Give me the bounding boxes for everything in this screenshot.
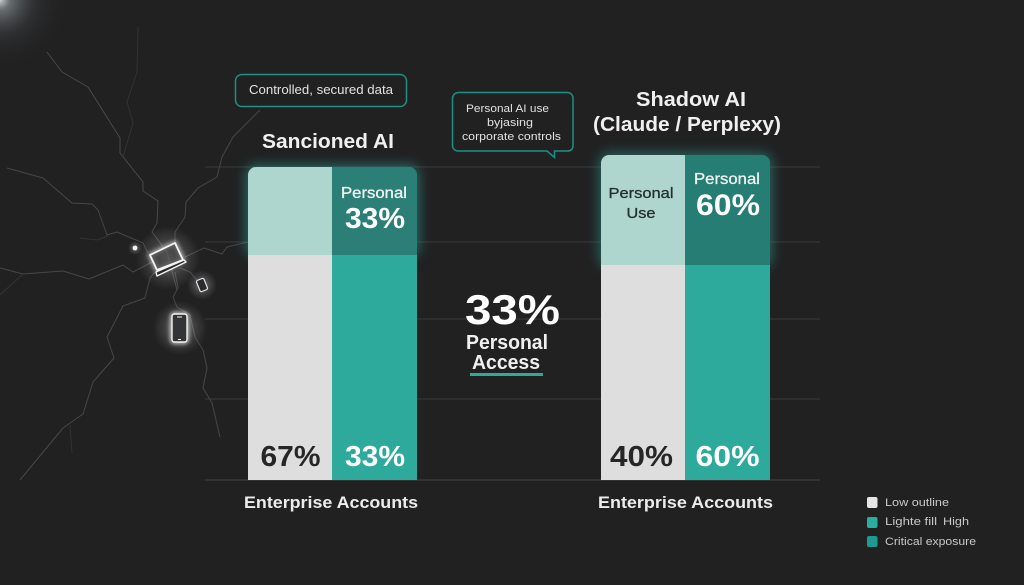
axis label: left enterprise accounts: Enterprise Accounts	[244, 494, 418, 512]
callout: controlled data: Controlled, secured data	[249, 83, 393, 97]
segment: light top	[248, 167, 332, 255]
legend: Critical exposure	[885, 536, 976, 548]
segment: enterprise personal 33%	[332, 255, 417, 480]
center stat: 33% personal access: Personal	[466, 332, 548, 354]
value: 60%: 60%	[696, 441, 760, 473]
axis label: right enterprise accounts: Enterprise Accounts	[598, 494, 773, 512]
value: 33%: 33%	[345, 441, 405, 473]
legend: Lighte fill	[885, 516, 937, 528]
legend: Low outline	[885, 497, 949, 509]
center stat: 33% personal access	[465, 286, 560, 376]
value: personal 33%: 33%	[345, 203, 405, 235]
cracks network radiating from devices	[0, 27, 260, 480]
segment: enterprise non-personal 40%	[601, 265, 685, 480]
label: personal use	[608, 185, 674, 222]
icon: laptop	[136, 226, 200, 290]
bar: shadow AI	[599, 153, 772, 480]
value: 40%: 40%	[610, 441, 673, 473]
bar: sanctioned AI	[246, 165, 419, 480]
callout: controlled data	[236, 74, 406, 106]
legend	[867, 497, 976, 548]
segment: dark top	[685, 155, 770, 265]
segment: enterprise personal 60%	[685, 265, 770, 480]
callout: personal AI use: corporate controls	[462, 131, 562, 143]
center stat: 33% personal access: Access	[472, 352, 540, 374]
callout: personal AI use: byjasing	[487, 117, 533, 129]
segment: enterprise non-personal 67%	[248, 255, 332, 480]
callout: personal AI use: Personal AI use	[466, 103, 549, 115]
icon: node dot	[128, 241, 142, 255]
label: personal use: Use	[626, 205, 656, 222]
legend: High	[943, 516, 969, 528]
callout: personal AI use	[452, 92, 573, 158]
segment: dark top	[332, 167, 417, 255]
value: 67%: 67%	[260, 441, 321, 473]
label: personal: Personal	[694, 171, 760, 188]
heading: shadow AI: Shadow AI	[636, 89, 746, 111]
center stat: 33% personal access: 33%	[465, 286, 560, 333]
value: personal 60%: 60%	[696, 189, 760, 222]
heading: sanctioned AI: Sancioned AI	[262, 131, 394, 153]
heading: shadow AI: (Claude / Perplexy)	[593, 114, 781, 136]
label: personal use: Personal	[608, 185, 674, 202]
label: personal: Personal	[341, 185, 407, 202]
icon: tablet	[187, 270, 217, 300]
icon: smartphone	[153, 301, 207, 355]
segment: light top	[601, 155, 685, 265]
heading: shadow AI	[593, 89, 781, 136]
